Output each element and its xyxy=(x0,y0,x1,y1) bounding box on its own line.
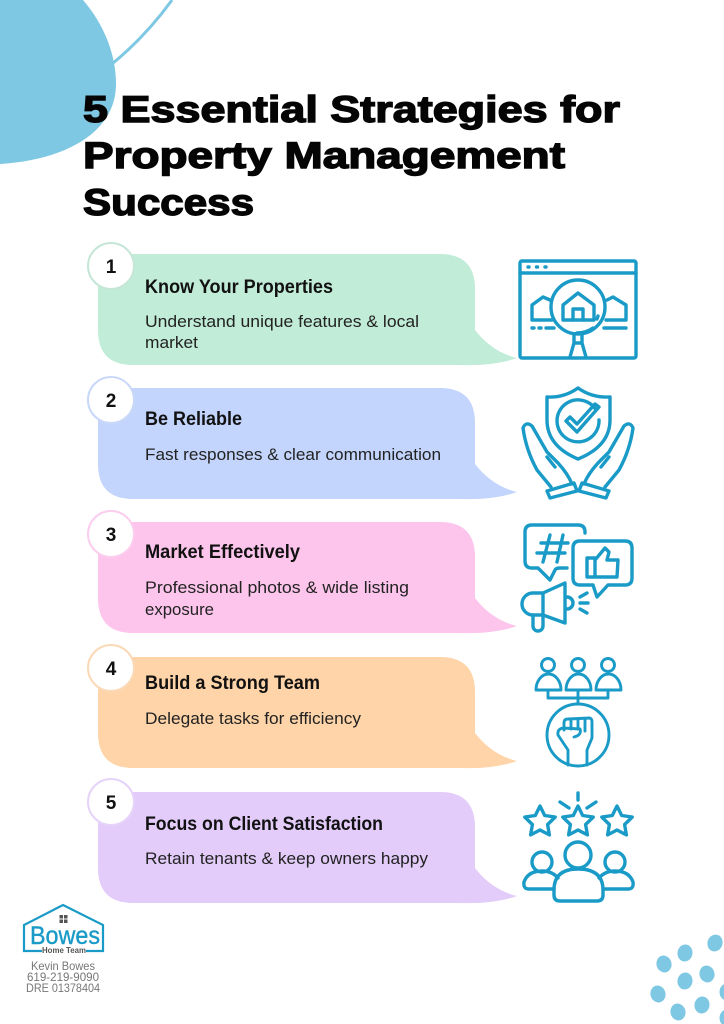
logo: Bowes Home Team xyxy=(24,905,103,955)
panel: step 4 build a strong team xyxy=(88,645,517,768)
panel: step 4 build a strong team: Delegate tasks for efficiency xyxy=(145,709,362,728)
panel: step 4 build a strong team: Build a Strong Team xyxy=(145,673,320,694)
panel: step 3 market effectively: Professional photos & wide listing xyxy=(145,578,409,597)
icon: stars above client group xyxy=(524,793,633,901)
panel: step 3 market effectively xyxy=(88,511,517,633)
icon: browser with magnifier over house xyxy=(520,261,636,358)
panel: step 1 know your properties: market xyxy=(145,333,198,352)
panel: step 1 know your properties: 1 xyxy=(106,257,117,278)
decorative dots: bottom right xyxy=(649,932,724,1024)
contact details: 619-219-9090 xyxy=(27,970,99,984)
panel: step 2 be reliable xyxy=(88,377,517,499)
contact details: DRE 01378404 xyxy=(26,981,100,995)
icon: shield with check held by hands xyxy=(523,388,633,498)
title: 5 Essential Strategies for xyxy=(83,89,620,130)
panel: step 5 focus on client satisfaction: Focus on Client Satisfaction xyxy=(145,814,383,835)
panel: step 3 market effectively: exposure xyxy=(145,600,214,619)
panel: step 5 focus on client satisfaction xyxy=(88,779,517,903)
decorative blob: top left xyxy=(0,0,172,164)
title: Success xyxy=(83,182,254,223)
panel: step 2 be reliable: 2 xyxy=(106,391,116,412)
contact details xyxy=(26,959,100,995)
panel: step 5 focus on client satisfaction: 5 xyxy=(106,793,117,814)
panel: step 1 know your properties xyxy=(88,243,517,365)
icon: social speech bubbles and megaphone xyxy=(522,525,632,631)
icon: team members and raised fist xyxy=(536,658,621,766)
panel: step 3 market effectively: 3 xyxy=(106,525,116,546)
panel: step 5 focus on client satisfaction: Retain tenants & keep owners happy xyxy=(145,849,429,868)
title xyxy=(83,89,620,223)
title: Property Management xyxy=(83,135,565,176)
panel: step 1 know your properties: Understand unique features & local xyxy=(145,312,419,331)
logo: Bowes Home Team: Home Team xyxy=(42,945,86,955)
panel: step 3 market effectively: Market Effectively xyxy=(145,542,300,563)
panel: step 2 be reliable: Fast responses & clear communication xyxy=(145,445,441,464)
contact details: Kevin Bowes xyxy=(31,959,95,973)
logo: Bowes Home Team: Bowes xyxy=(30,922,100,950)
panel: step 4 build a strong team: 4 xyxy=(106,659,117,680)
panel: step 1 know your properties: Know Your Properties xyxy=(145,277,333,298)
panel: step 2 be reliable: Be Reliable xyxy=(145,409,242,430)
